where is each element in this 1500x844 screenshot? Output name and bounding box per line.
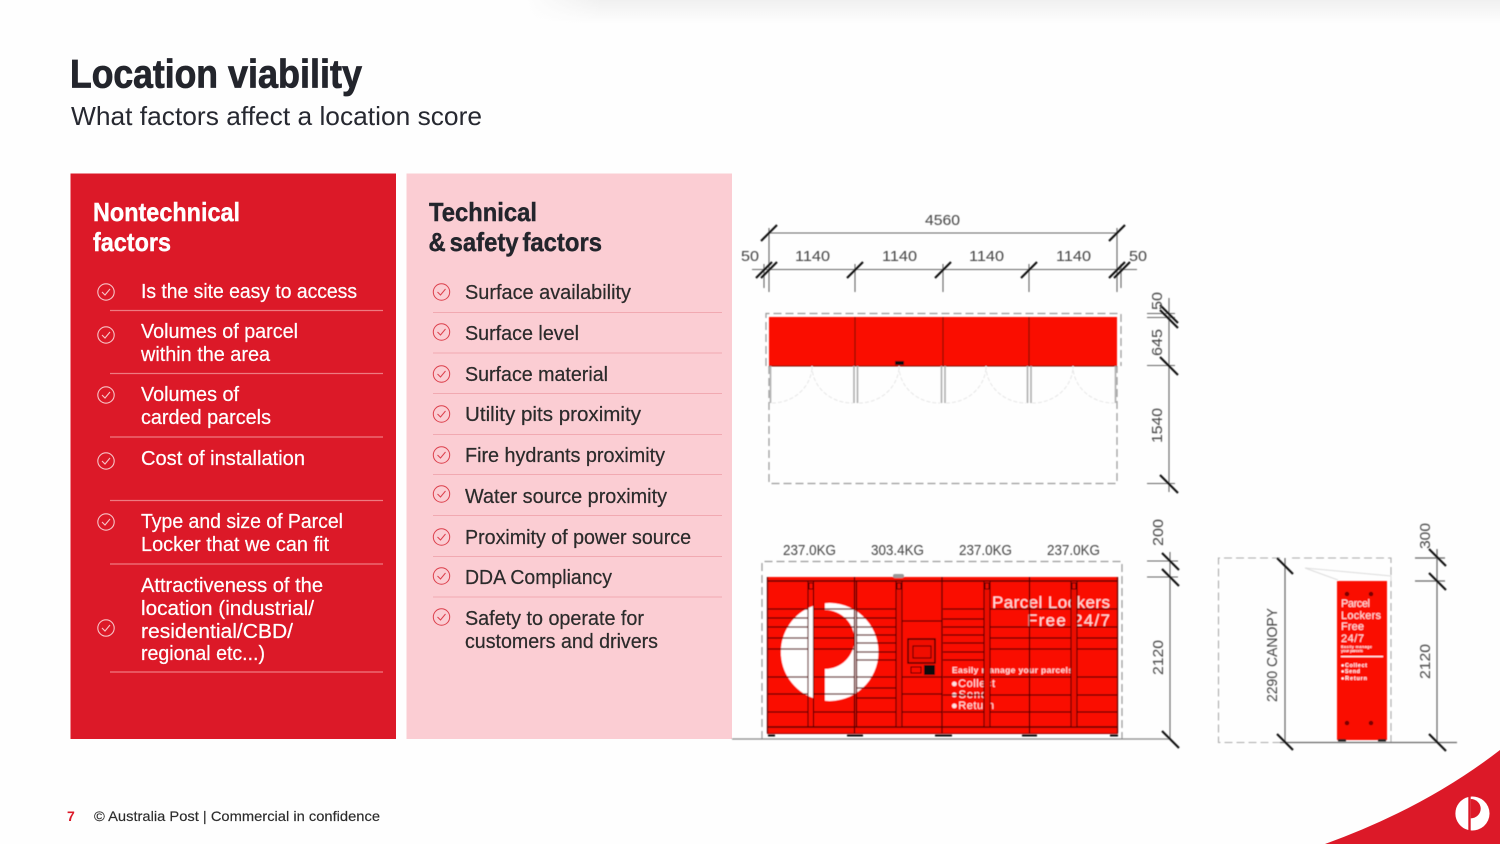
plan width dimensions [741,212,1147,292]
plan width dimensions: 1140 [969,248,1004,265]
plan width dimensions: 1140 [882,248,917,265]
side locker signage: Parcel [1341,598,1370,610]
locker signage: Easily manage your parcels [952,665,1073,675]
plan width dimensions: 50 [741,248,759,265]
heading: nontechnical factors: Nontechnical [93,197,240,227]
module weights: 237.0KG [783,542,836,559]
locker bank body [767,577,1118,733]
front elevation drawing [732,519,1179,748]
panel: technical and safety factors [406,174,732,739]
technical list text: Surface level [465,323,579,345]
technical check icons [433,284,450,625]
side locker bolts and feet [1338,592,1386,742]
icon: Australia Post logo [1455,797,1490,831]
ground line and feet [732,734,1170,739]
canopy outline [1218,558,1391,742]
locker signage [951,593,1110,712]
side dimensions: 2120 [1417,644,1434,679]
module weights: 303.4KG [871,542,924,559]
heading: technical and safety factors: & safety factors [428,227,602,257]
module weights [783,542,1100,559]
kiosk screen [908,639,935,675]
technical list text: Safety to operate for [465,608,644,630]
locker signage: ●Send [951,689,987,701]
nontechnical list text: Volumes of parcel [141,321,298,343]
locker doors [767,577,1118,733]
nontechnical list text: Is the site easy to access [141,281,357,303]
side locker signage [1341,598,1383,682]
nontechnical list text: location (industrial/ [141,598,314,620]
technical list text: Proximity of power source [465,527,691,549]
side locker signage: Lockers [1341,610,1382,622]
plan view drawing [741,212,1178,493]
plan depth dimensions [1147,292,1178,493]
plan outline and locker footprint [766,314,1121,484]
Australia Post logo on locker [781,603,878,701]
technical list text: Water source proximity [465,486,667,508]
technical list text: Utility pits proximity [465,404,641,426]
plan width dimensions: 1140 [795,248,830,265]
nontechnical list text [140,281,357,665]
heading: technical and safety factors: Technical [429,197,537,227]
side dimensions: 2290 CANOPY [1264,608,1281,702]
nontechnical list dividers [110,310,383,672]
subtitle: What factors affect a location score [71,101,482,131]
plan width dimensions: 1140 [1056,248,1091,265]
nontechnical list text: Type and size of Parcel [141,511,343,533]
side locker body [1337,581,1387,740]
technical list text: Surface material [465,364,608,386]
plan depth dimensions: 645 [1149,329,1166,356]
nontechnical list text: Attractiveness of the [141,575,323,597]
locker signage: Parcel Lockers [992,593,1110,612]
side elevation drawing [1218,523,1457,751]
nontechnical list text: regional etc...) [141,643,265,665]
nontechnical check icons [98,284,114,636]
plan width dimensions: 50 [1129,248,1147,265]
title [70,52,363,96]
copyright: © Australia Post | Commercial in confidence [94,808,380,824]
clearance outline [762,562,1122,739]
locker signage: Free 24/7 [1027,611,1110,630]
side dimensions [1264,523,1457,751]
nontechnical list text: Cost of installation [141,448,305,470]
heading: nontechnical factors: factors [93,227,171,257]
module weights: 237.0KG [1047,542,1100,559]
nontechnical list text: residential/CBD/ [141,621,293,643]
nontechnical list text: carded parcels [141,407,271,429]
locker signage: ●Return [951,700,994,712]
footer [67,808,380,824]
nontechnical list text: Volumes of [141,384,239,406]
side locker signage: your parcels [1341,648,1364,653]
technical list text: DDA Compliancy [465,567,612,589]
plan depth dimensions: 50 [1149,292,1166,310]
plan depth dimensions: 1540 [1149,408,1166,443]
side locker signage: ●Collect [1341,663,1367,669]
technical list text [465,282,691,653]
title: Location [70,52,218,96]
module weights: 237.0KG [959,542,1012,559]
plan width dimensions: 4560 [925,212,960,229]
page number: 7 [67,808,75,824]
heading: nontechnical factors [93,197,240,257]
heading: technical and safety factors [428,197,602,257]
side locker signage: ●Return [1341,676,1368,682]
side locker signage: Easily manage [1341,644,1373,649]
technical list dividers [433,312,722,597]
technical list text: customers and drivers [465,631,658,653]
nontechnical list text: within the area [140,344,271,366]
technical list text: Surface availability [465,282,631,304]
panel: nontechnical factors [70,174,396,739]
front height dimensions: 200 [1150,519,1167,546]
technical list text: Fire hydrants proximity [465,445,665,467]
side locker signage: Free [1341,621,1364,633]
title: viability [228,52,363,96]
nontechnical list text: Locker that we can fit [141,534,329,556]
corner swoosh with logo [1325,750,1500,844]
side dimensions: 300 [1417,523,1434,549]
front height dimensions [1147,519,1179,748]
locker signage: ●Collect [951,678,995,690]
side locker signage: ●Send [1341,669,1360,675]
side locker signage: 24/7 [1341,633,1364,645]
front height dimensions: 2120 [1150,640,1167,675]
